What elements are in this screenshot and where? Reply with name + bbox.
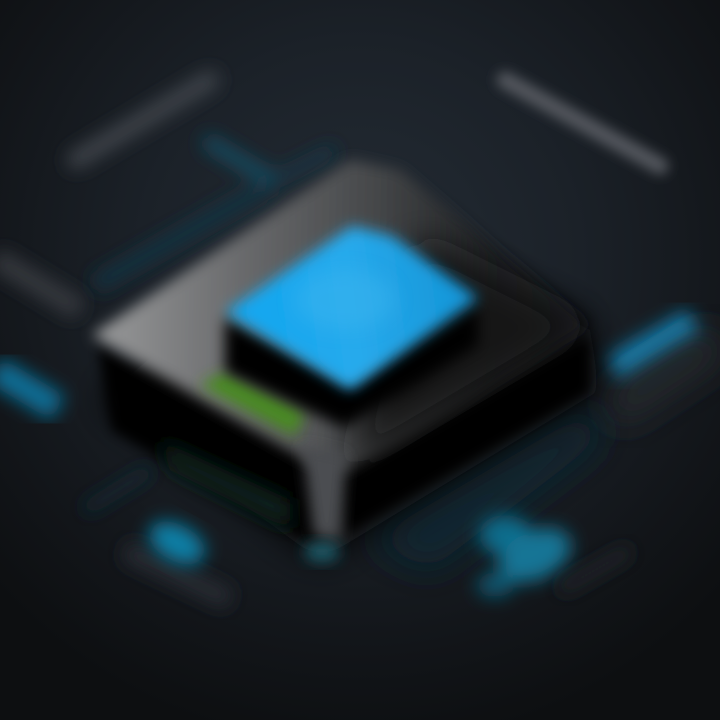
left blue bar	[0, 370, 58, 408]
bottom right blue icon	[477, 515, 580, 597]
screen highlight	[295, 270, 395, 330]
faint blue lines above device	[95, 140, 335, 285]
blue screen	[226, 226, 478, 390]
post foot	[304, 541, 340, 563]
device shadow	[100, 200, 600, 560]
right face	[340, 335, 590, 535]
left face	[98, 345, 320, 548]
right blue bar	[612, 322, 694, 370]
right grey curve	[610, 340, 720, 412]
top face	[92, 160, 590, 470]
device	[92, 160, 600, 563]
dark green reflection	[160, 440, 290, 530]
lower right glow	[370, 410, 600, 570]
top-right grey bar	[505, 80, 660, 166]
bottom left grey bar	[125, 550, 230, 600]
left grey bar	[0, 258, 80, 310]
top-left grey bar	[76, 80, 210, 160]
bottom left blue icon	[142, 513, 212, 573]
green strip	[200, 372, 305, 436]
faint blue trace left	[85, 470, 150, 510]
dark tint on right of top face	[345, 240, 590, 470]
screen base	[225, 308, 478, 428]
corner post	[302, 445, 346, 540]
bottom right grey trace	[560, 550, 630, 590]
